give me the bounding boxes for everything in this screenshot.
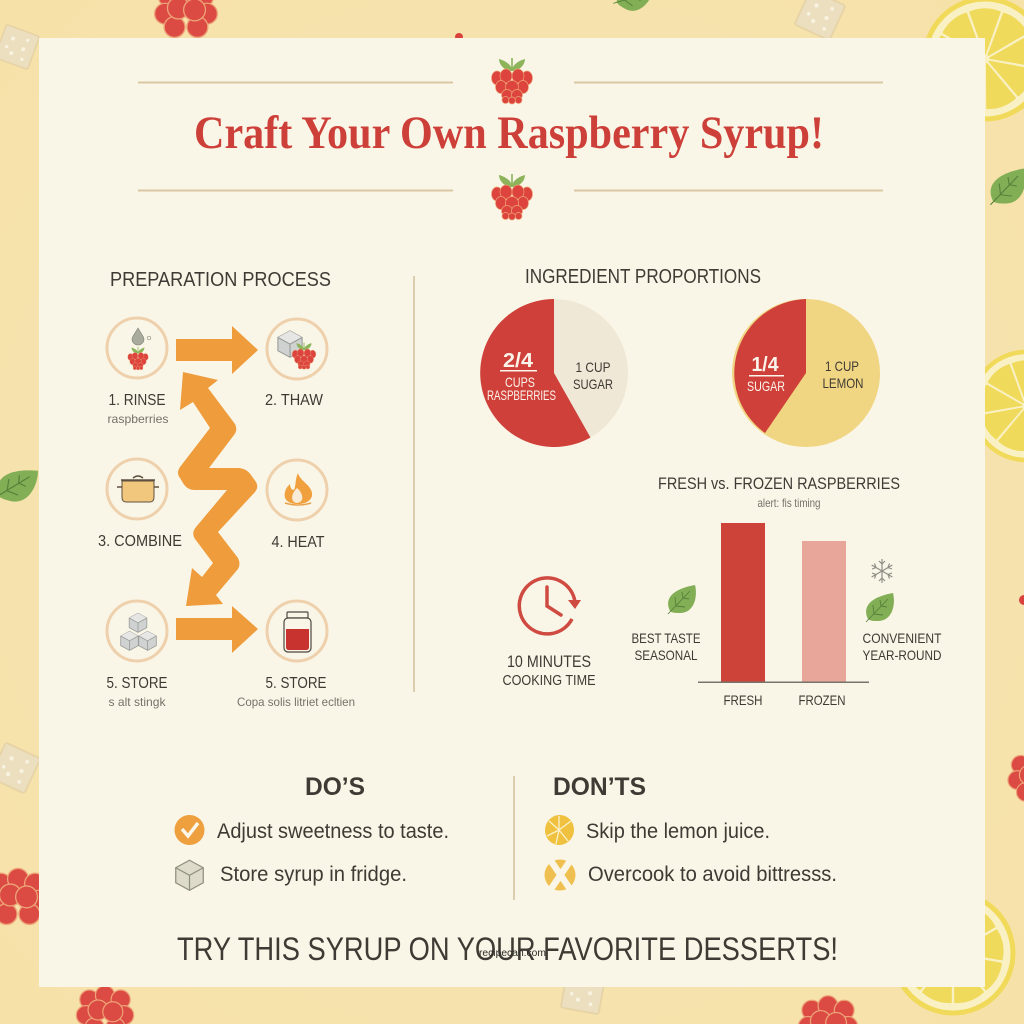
- heading: ingredient proportions: INGREDIENT PROPORTIONS: [525, 266, 761, 288]
- step 5 store jar: [237, 601, 355, 709]
- divider: [513, 776, 515, 900]
- step 5 store cubes: s alt stingk: [108, 695, 166, 709]
- icon: check: [174, 815, 204, 845]
- icon: raspberry bottom: [492, 174, 532, 220]
- panel: don'ts: Skip the lemon juice.: [586, 820, 770, 843]
- icon: snowflake: [872, 559, 892, 583]
- icon: sugar cube: [176, 860, 203, 890]
- step 1 rinse: 1. RINSE: [108, 392, 166, 409]
- pie chart: raspberries and sugar: CUPS: [505, 374, 535, 390]
- panel: preparation process: [98, 269, 355, 709]
- heading: preparation process: PREPARATION PROCESS: [110, 269, 331, 291]
- heading: do's: DO’S: [305, 773, 365, 801]
- icon: cross: [544, 860, 576, 890]
- step 4 heat: [267, 460, 327, 551]
- bar chart: FROZEN: [798, 692, 846, 708]
- label: convenient: CONVENIENT: [862, 630, 942, 646]
- arrow: rinse to thaw: [176, 326, 258, 374]
- call to action: TRY THIS SYRUP ON YOUR FAVORITE DESSERTS!: [177, 931, 838, 967]
- watermark: recipecan.com: [479, 948, 546, 959]
- arrow: zigzag: [178, 372, 257, 606]
- icon: lemon: [542, 812, 577, 848]
- icon: leaf frozen: [866, 593, 894, 622]
- pie chart: raspberries and sugar: 2/4: [503, 350, 534, 372]
- heading: fresh vs frozen: FRESH vs. FROZEN RASPBERRIES: [658, 474, 900, 493]
- arrow: store to store: [176, 606, 258, 653]
- header: [138, 58, 883, 220]
- panel: don'ts: Overcook to avoid bittresss.: [588, 863, 837, 886]
- label: best taste: SEASONAL: [634, 647, 698, 663]
- panel: fresh vs frozen: [632, 474, 942, 708]
- icon: leaf fresh: [668, 585, 696, 614]
- pie chart: sugar and lemon: [732, 299, 880, 447]
- heading: don'ts: DON’TS: [553, 773, 646, 801]
- panel: ingredient proportions: [480, 266, 880, 447]
- panel: cooking time: [502, 578, 596, 689]
- pie chart: sugar and lemon: SUGAR: [747, 378, 785, 394]
- bar chart: FRESH: [724, 692, 762, 708]
- pie chart: sugar and lemon: 1 CUP: [825, 358, 859, 374]
- bar chart: [698, 523, 869, 708]
- panel: cooking time: COOKING TIME: [502, 672, 596, 689]
- step 5 store cubes: 5. STORE: [106, 675, 168, 692]
- pie chart: raspberries and sugar: 1 CUP: [576, 359, 610, 375]
- step 4 heat: 4. HEAT: [272, 534, 325, 551]
- title: Craft Your Own Raspberry Syrup!: [194, 107, 824, 159]
- step 2 thaw: 2. THAW: [265, 392, 324, 409]
- step 3 combine: 3. COMBINE: [98, 533, 182, 550]
- label: best taste: [632, 630, 700, 663]
- panel: don'ts: [542, 773, 837, 890]
- panel: do's: Adjust sweetness to taste.: [217, 820, 449, 843]
- step 5 store jar: Copa solis litriet ecltien: [237, 695, 355, 709]
- label: best taste: BEST TASTE: [632, 630, 700, 646]
- step 5 store cubes: [106, 601, 168, 709]
- step 3 combine: [98, 459, 182, 550]
- panel: do's: Store syrup in fridge.: [220, 863, 407, 886]
- pie chart: sugar and lemon: LEMON: [822, 375, 864, 391]
- subtitle: alert: fis timing: [758, 496, 820, 510]
- pie chart: sugar and lemon: 1/4: [752, 354, 779, 376]
- icon: clock: [519, 578, 581, 634]
- icon: raspberry top: [492, 58, 532, 104]
- step 1 rinse: [107, 318, 168, 426]
- label: convenient: [862, 630, 942, 663]
- panel: cooking time: 10 MINUTES: [507, 652, 591, 671]
- step 2 thaw: [265, 319, 327, 409]
- pie chart: raspberries and sugar: [480, 299, 628, 447]
- divider: [413, 276, 415, 692]
- panel: do's: [174, 773, 449, 890]
- label: convenient: YEAR-ROUND: [862, 647, 942, 663]
- pie chart: raspberries and sugar: SUGAR: [573, 376, 613, 392]
- step 1 rinse: raspberries: [108, 412, 168, 426]
- step 5 store jar: 5. STORE: [266, 675, 326, 692]
- pie chart: raspberries and sugar: RASPBERRIES: [487, 387, 556, 403]
